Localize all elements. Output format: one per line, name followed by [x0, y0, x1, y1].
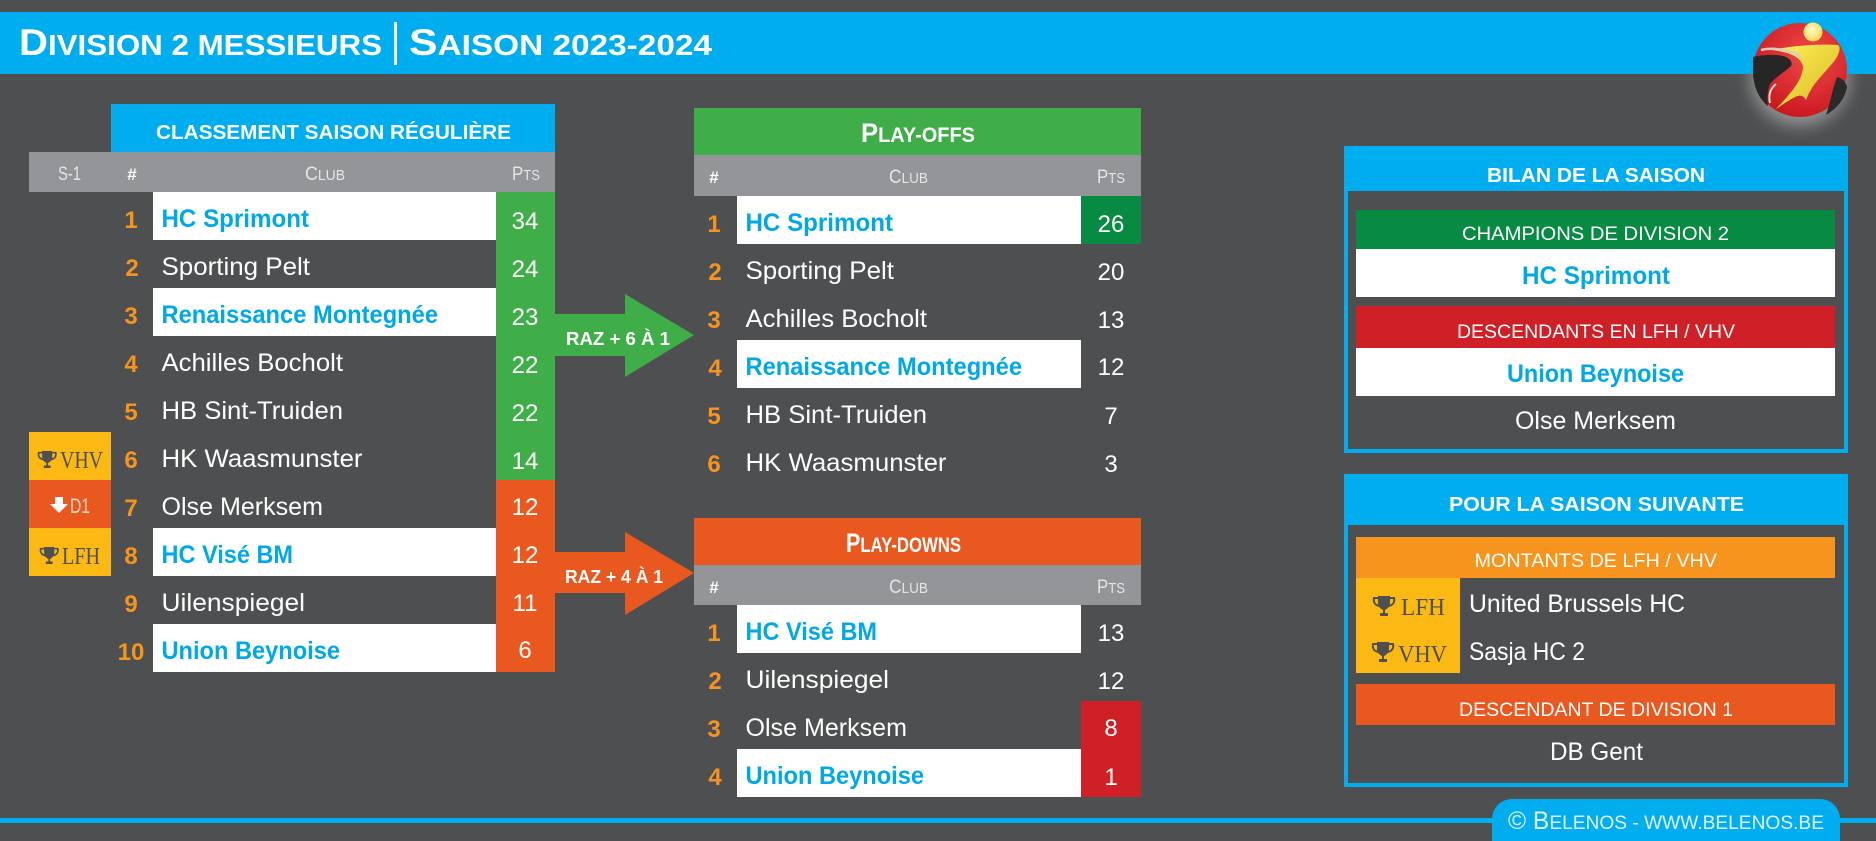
arrow: RAZ + 6 à 1: [555, 294, 694, 377]
row 3: 3: [707, 716, 721, 743]
row 10: 10: [118, 639, 144, 666]
row 8: 8: [124, 543, 138, 570]
table header row: [694, 155, 1141, 196]
relegated from D1 bar: DESCENDANT DE DIVISION 1: [1459, 700, 1733, 721]
champion team: [1356, 249, 1835, 297]
row 6: 6: [707, 451, 721, 478]
heading: play-offs: [694, 108, 1141, 155]
row 1: 34: [512, 208, 538, 235]
table header row: CLUB: [889, 167, 928, 188]
row 1: 1: [124, 207, 138, 234]
row 4: [708, 340, 1124, 388]
row 2: 12: [1098, 668, 1124, 695]
row 3: [707, 701, 1141, 797]
row 3: Olse Merksem: [746, 714, 907, 742]
row 1: [707, 605, 1124, 653]
champions bar: [1356, 210, 1835, 249]
table header row: PTS: [1097, 577, 1125, 598]
promoted team 1: United Brussels HC: [1469, 590, 1685, 618]
title banner: DIVISION 2 MESSIEURS: [19, 22, 382, 63]
footer credit: © BELENOS - WWW.BELENOS.BE: [1508, 807, 1824, 835]
row 8: [124, 528, 538, 576]
row 4: 12: [1098, 354, 1124, 381]
row 5: [707, 401, 1118, 430]
table header row: #: [709, 168, 719, 187]
champions bar: CHAMPIONS DE DIVISION 2: [1462, 224, 1729, 245]
row 4: 22: [512, 352, 538, 379]
row 5: 22: [512, 400, 538, 427]
relegated bar: [1356, 306, 1835, 348]
points column background: [496, 192, 555, 672]
row 1: HC Sprimont: [162, 205, 310, 233]
row 6: 14: [512, 448, 538, 475]
row 2: 24: [512, 256, 538, 283]
row 9: 11: [513, 590, 537, 617]
icon: Belenos logo: [1753, 22, 1847, 117]
row 1: 26: [1098, 211, 1124, 238]
row 7: 7: [124, 495, 138, 522]
relegated team 2: Olse Merksem: [1515, 407, 1676, 435]
row 9: [124, 589, 537, 618]
badge: D1 relegated: D1: [70, 495, 90, 518]
row 3: Achilles Bocholt: [746, 305, 927, 333]
row 3: 8: [1104, 715, 1118, 742]
heading: play-downs: PLAY-DOWNS: [846, 528, 961, 558]
row 5: 5: [707, 403, 721, 430]
row 7: 12: [512, 494, 538, 521]
row 2: Uilenspiegel: [746, 666, 889, 694]
relegated from D1 bar: [1356, 684, 1835, 725]
row 6: [124, 445, 538, 475]
heading: play-downs: [694, 518, 1141, 565]
row 1: 13: [1098, 620, 1124, 647]
row 8: HC Visé BM: [162, 541, 293, 569]
row 8: 12: [512, 542, 538, 569]
heading: classement: [111, 104, 555, 152]
row 1: [124, 192, 538, 240]
badge: LFH previous season: [29, 528, 111, 576]
row 3: 23: [512, 304, 538, 331]
row 9: Uilenspiegel: [162, 589, 305, 617]
heading: bilan: BILAN DE LA SAISON: [1487, 165, 1705, 187]
row 4: 4: [708, 355, 722, 382]
panel: bilan de la saison: [1344, 146, 1848, 451]
row 6: 3: [1104, 451, 1118, 478]
relegated from D1 team: DB Gent: [1550, 738, 1643, 766]
row 2: 2: [708, 259, 722, 286]
row 5: [124, 397, 538, 427]
row 10: 6: [518, 637, 532, 664]
table header row: S-1: [58, 164, 81, 185]
row 4: 4: [124, 351, 138, 378]
row 1: 1: [707, 211, 721, 238]
row 2: Sporting Pelt: [162, 253, 310, 281]
badge: VHV previous season: VHV: [60, 448, 104, 474]
badges: LFH and VHV: [1356, 578, 1460, 673]
badge: VHV previous season: [29, 432, 111, 480]
row 6: 6: [124, 447, 138, 474]
row 5: 5: [124, 399, 138, 426]
row 2: Sporting Pelt: [746, 257, 894, 285]
heading: bilan: [1344, 146, 1848, 191]
row 4: [708, 749, 1118, 797]
relegated bar: DESCENDANTS EN LFH / VHV: [1457, 322, 1735, 343]
row 3: Renaissance Montegnée: [162, 301, 438, 329]
row 3: [707, 305, 1124, 334]
badge: LFH previous season: LFH: [62, 544, 100, 570]
row 6: [707, 449, 1118, 478]
panel: play-offs: [694, 108, 1141, 478]
row 2: [708, 666, 1124, 695]
row 4: Achilles Bocholt: [162, 349, 343, 377]
heading: suivante: POUR LA SAISON SUIVANTE: [1449, 494, 1744, 516]
table header row: PTS: [1097, 167, 1125, 188]
row 1: 1: [707, 620, 721, 647]
row 5: 7: [1104, 403, 1118, 430]
promoted bar: [1356, 537, 1835, 578]
heading: suivante: [1344, 474, 1848, 525]
title banner: SAISON 2023-2024: [409, 22, 712, 63]
title banner: [0, 12, 1876, 74]
row 4: 1: [1104, 764, 1118, 791]
row 3: 13: [1098, 307, 1124, 334]
row 2: 2: [708, 668, 722, 695]
row 3: [124, 288, 538, 336]
table header row: [694, 565, 1141, 605]
heading: play-offs: PLAY-OFFS: [861, 118, 975, 148]
panel: play-downs: [694, 518, 1141, 797]
row 10: [118, 624, 532, 672]
table header row: PTS: [512, 164, 540, 185]
promoted team 2: Sasja HC 2: [1469, 638, 1585, 666]
badges: LFH and VHV: LFH: [1401, 595, 1445, 621]
table header row: CLUB: [305, 164, 345, 185]
row 4: [124, 349, 538, 379]
footer credit: [1492, 799, 1840, 841]
row 3: 3: [707, 307, 721, 334]
promoted bar: MONTANTS DE LFH / VHV: [1474, 551, 1717, 572]
row 6: HK Waasmunster: [162, 445, 362, 473]
badge: D1 relegated: [29, 480, 111, 528]
row 10: Union Beynoise: [162, 637, 340, 665]
row 4: 4: [708, 764, 722, 791]
row 2: [125, 253, 538, 283]
relegated team 1: Union Beynoise: [1507, 360, 1684, 388]
row 7: Olse Merksem: [162, 493, 323, 521]
row 9: 9: [124, 591, 138, 618]
table header row: [29, 152, 555, 192]
row 4: Union Beynoise: [746, 762, 924, 790]
relegated team 1: [1356, 348, 1835, 396]
row 2: 2: [125, 255, 139, 282]
arrow: RAZ + 4 à 1: RAZ + 4 À 1: [565, 566, 663, 587]
arrow: RAZ + 4 à 1: [555, 532, 694, 615]
badges: LFH and VHV: VHV: [1398, 642, 1448, 668]
row 1: [707, 196, 1141, 244]
row 1: HC Sprimont: [746, 209, 894, 237]
row 4: Renaissance Montegnée: [746, 353, 1022, 381]
row 3: 3: [124, 303, 138, 330]
footer line: [0, 818, 1876, 823]
row 7: [124, 493, 538, 522]
table header row: #: [127, 165, 137, 184]
row 2: [708, 257, 1124, 286]
heading: classement: CLASSEMENT SAISON RÉGULIÈRE: [156, 121, 511, 144]
row 5: HB Sint-Truiden: [746, 401, 927, 429]
row 2: 20: [1098, 259, 1124, 286]
row 1: HC Visé BM: [746, 618, 877, 646]
champion team: HC Sprimont: [1522, 262, 1671, 290]
panel: classement saison régulière: [29, 104, 555, 672]
row 6: HK Waasmunster: [746, 449, 946, 477]
row 5: HB Sint-Truiden: [162, 397, 343, 425]
panel: pour la saison suivante: [1344, 474, 1848, 785]
arrow: RAZ + 6 à 1: RAZ + 6 À 1: [566, 328, 670, 349]
table header row: #: [709, 578, 719, 597]
table header row: CLUB: [889, 577, 928, 598]
